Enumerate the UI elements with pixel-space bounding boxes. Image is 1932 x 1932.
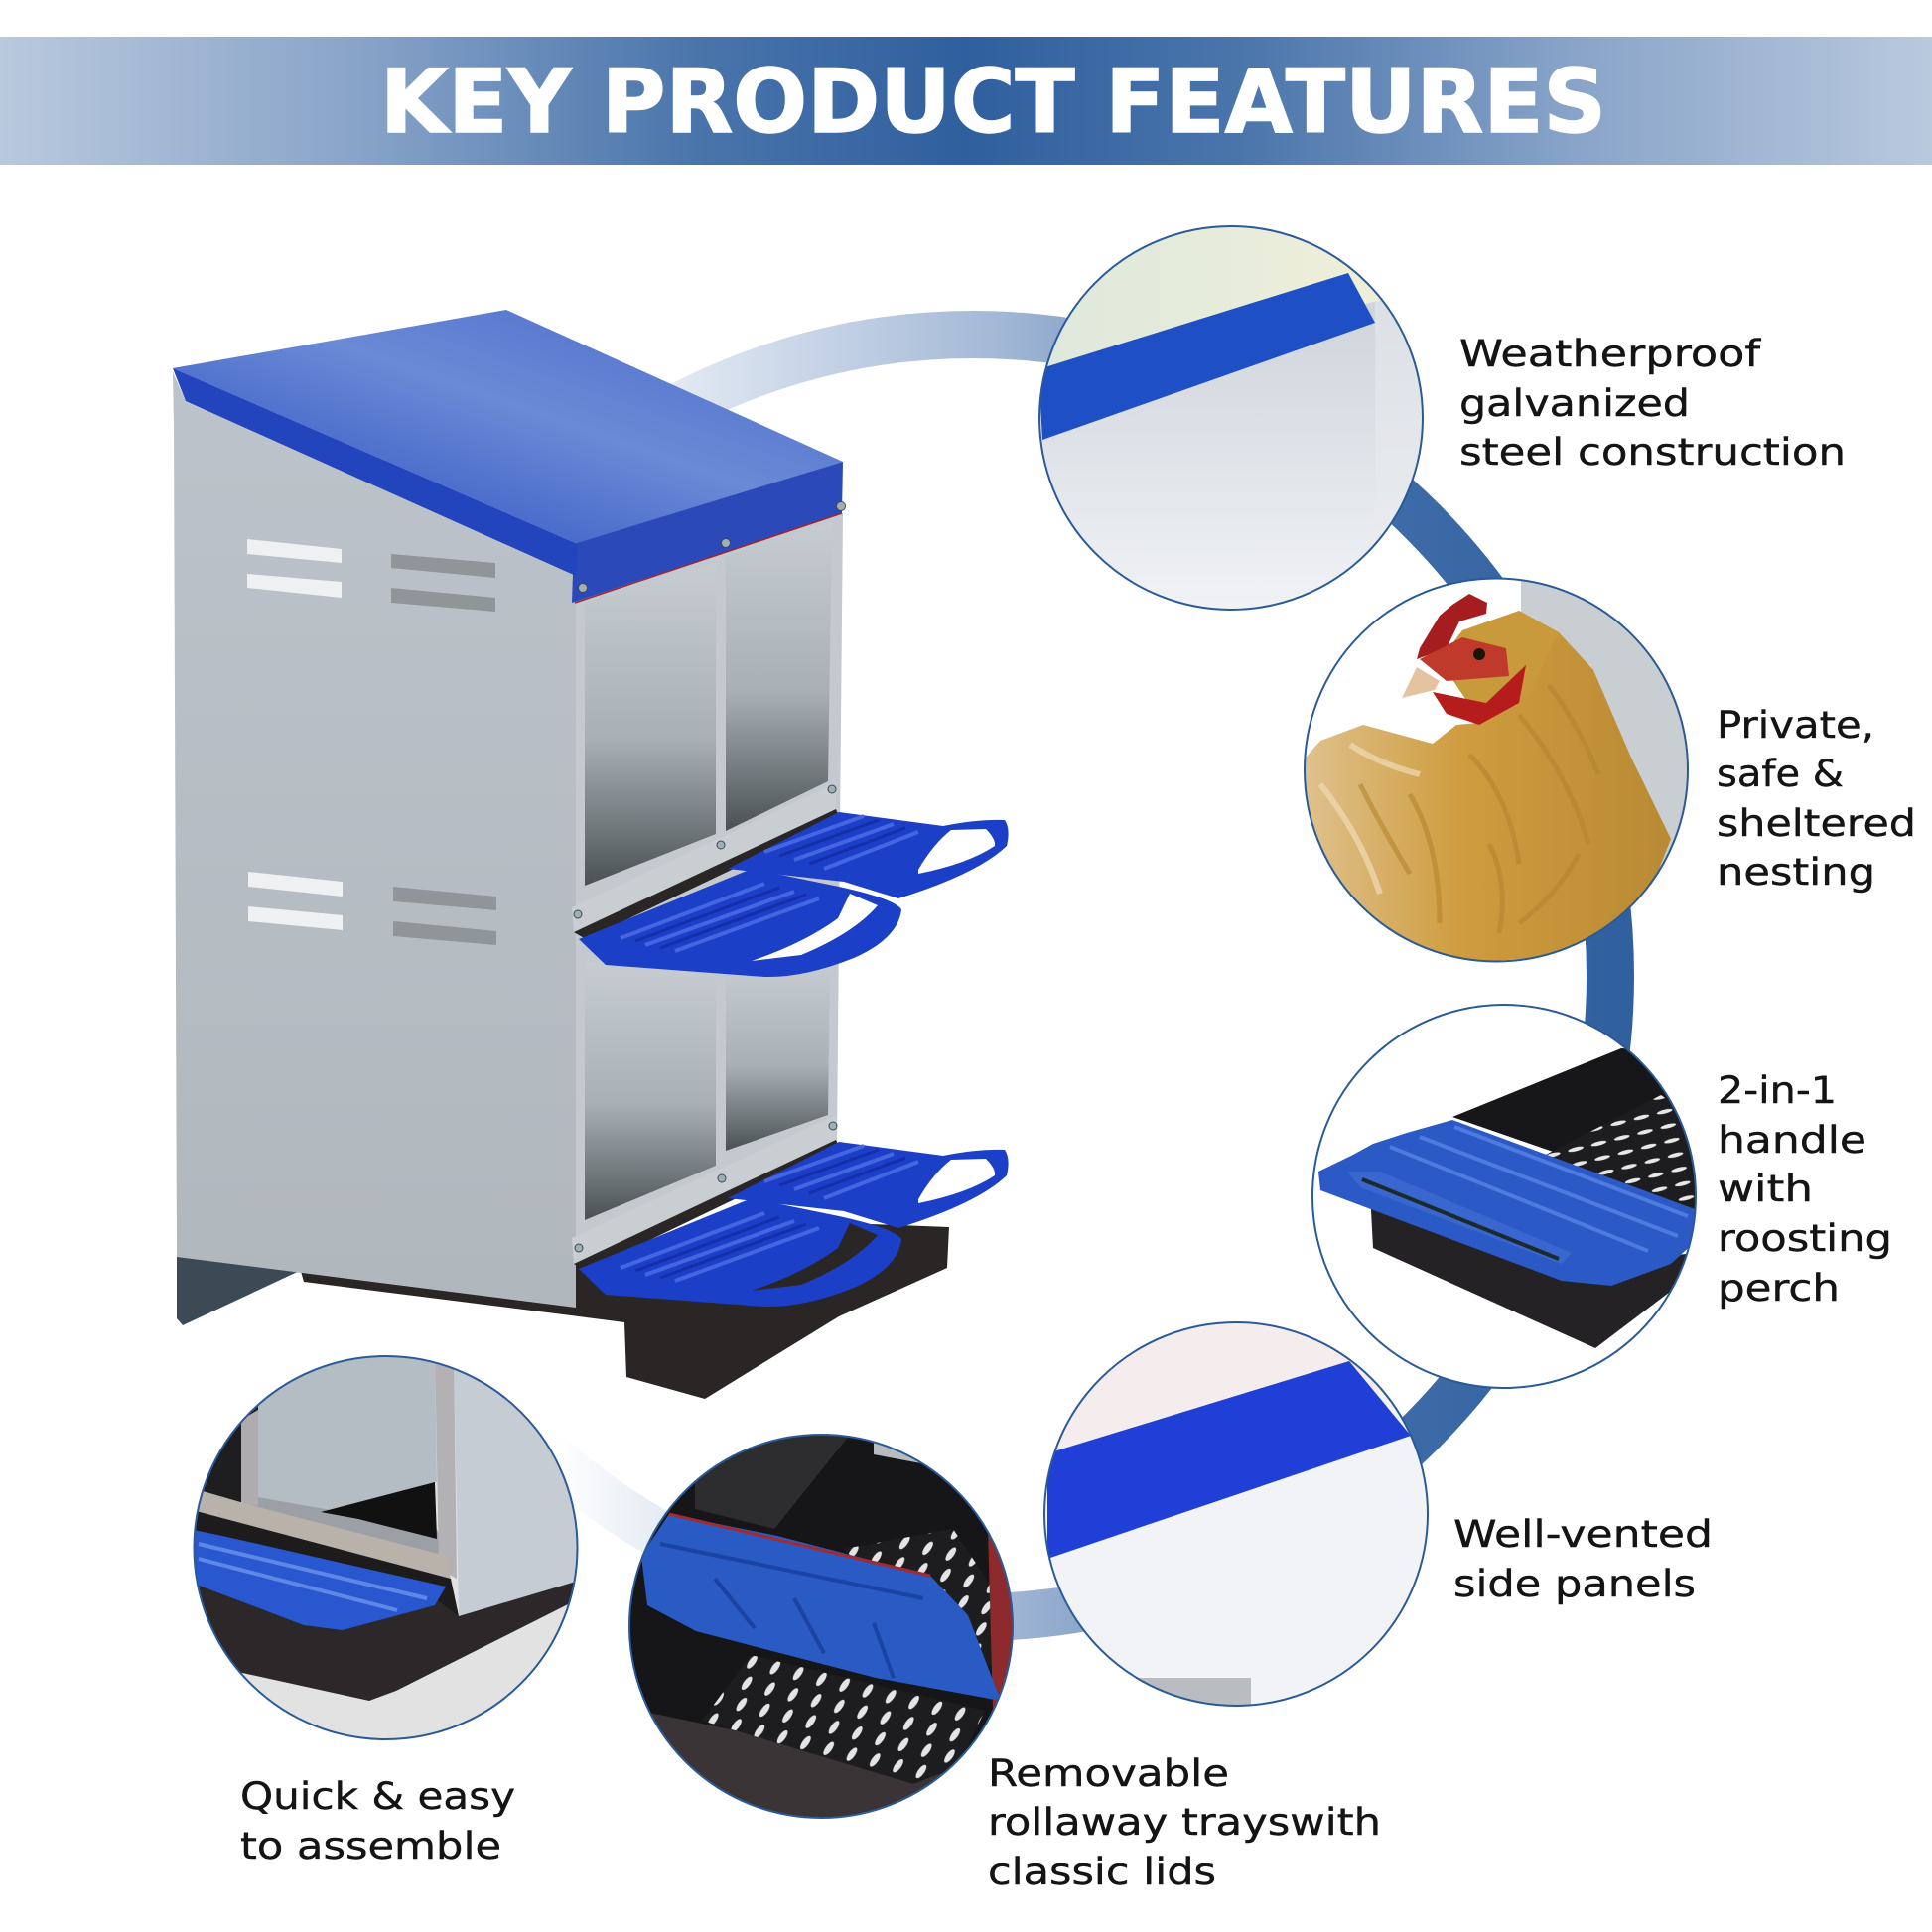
side panel xyxy=(173,372,576,1308)
front rails xyxy=(572,783,840,1271)
black base trays xyxy=(298,1221,949,1399)
label: handle perch xyxy=(1718,1069,1892,1310)
label: galvanized steel: steel construction xyxy=(1459,431,1846,474)
label: removable trays: Removable xyxy=(988,1752,1229,1795)
feature circle: easy assembly xyxy=(189,1350,586,1747)
label: easy assembly: Quick & easy xyxy=(240,1775,515,1818)
label: galvanized steel: galvanized xyxy=(1459,382,1690,425)
icon: hen head xyxy=(1417,594,1487,659)
lower trays xyxy=(579,1142,1009,1307)
label: removable trays: classic lids xyxy=(988,1851,1216,1893)
roof xyxy=(173,310,843,603)
label: vented panels: Well-vented xyxy=(1453,1513,1713,1556)
legs xyxy=(177,1249,304,1325)
feature circle: handle perch xyxy=(1311,1003,1708,1400)
feature circle: vented panels xyxy=(1042,1320,1440,1718)
label: vented panels: side panels xyxy=(1453,1563,1696,1605)
label: vented panels xyxy=(1453,1513,1713,1605)
label: handle perch: with xyxy=(1718,1168,1813,1210)
label: nesting xyxy=(1717,704,1916,894)
side vents xyxy=(247,539,496,945)
label: easy assembly xyxy=(240,1775,515,1867)
label: easy assembly: to assemble xyxy=(240,1825,501,1867)
feature circle: removable trays xyxy=(625,1430,1023,1837)
feature circle: hen nesting xyxy=(1291,576,1700,973)
connecting ring xyxy=(336,335,1610,1617)
label: nesting: nesting xyxy=(1717,851,1875,894)
feature circle: galvanized steel xyxy=(1033,218,1430,616)
label: removable trays: rollaway trayswith xyxy=(988,1801,1381,1844)
label: galvanized steel: Weatherproof xyxy=(1459,333,1761,375)
label: handle perch: roosting xyxy=(1718,1217,1892,1260)
label: nesting: Private, xyxy=(1717,704,1874,747)
label: handle perch: handle xyxy=(1718,1119,1866,1162)
label: nesting: sheltered xyxy=(1717,802,1916,845)
label: handle perch: perch xyxy=(1718,1267,1840,1310)
label: galvanized steel xyxy=(1459,333,1846,474)
icon: hen body xyxy=(1291,611,1671,968)
nest openings xyxy=(585,522,832,1220)
front frame xyxy=(572,513,843,1266)
title: KEY PRODUCT FEATURES xyxy=(380,51,1606,153)
label: handle perch: 2-in-1 xyxy=(1718,1069,1837,1112)
label: nesting: safe & xyxy=(1717,753,1844,795)
label: removable trays xyxy=(988,1752,1381,1893)
screws xyxy=(574,502,846,1252)
title banner xyxy=(0,37,1932,165)
product: nesting box xyxy=(173,310,1009,1399)
upper trays xyxy=(579,812,1009,977)
